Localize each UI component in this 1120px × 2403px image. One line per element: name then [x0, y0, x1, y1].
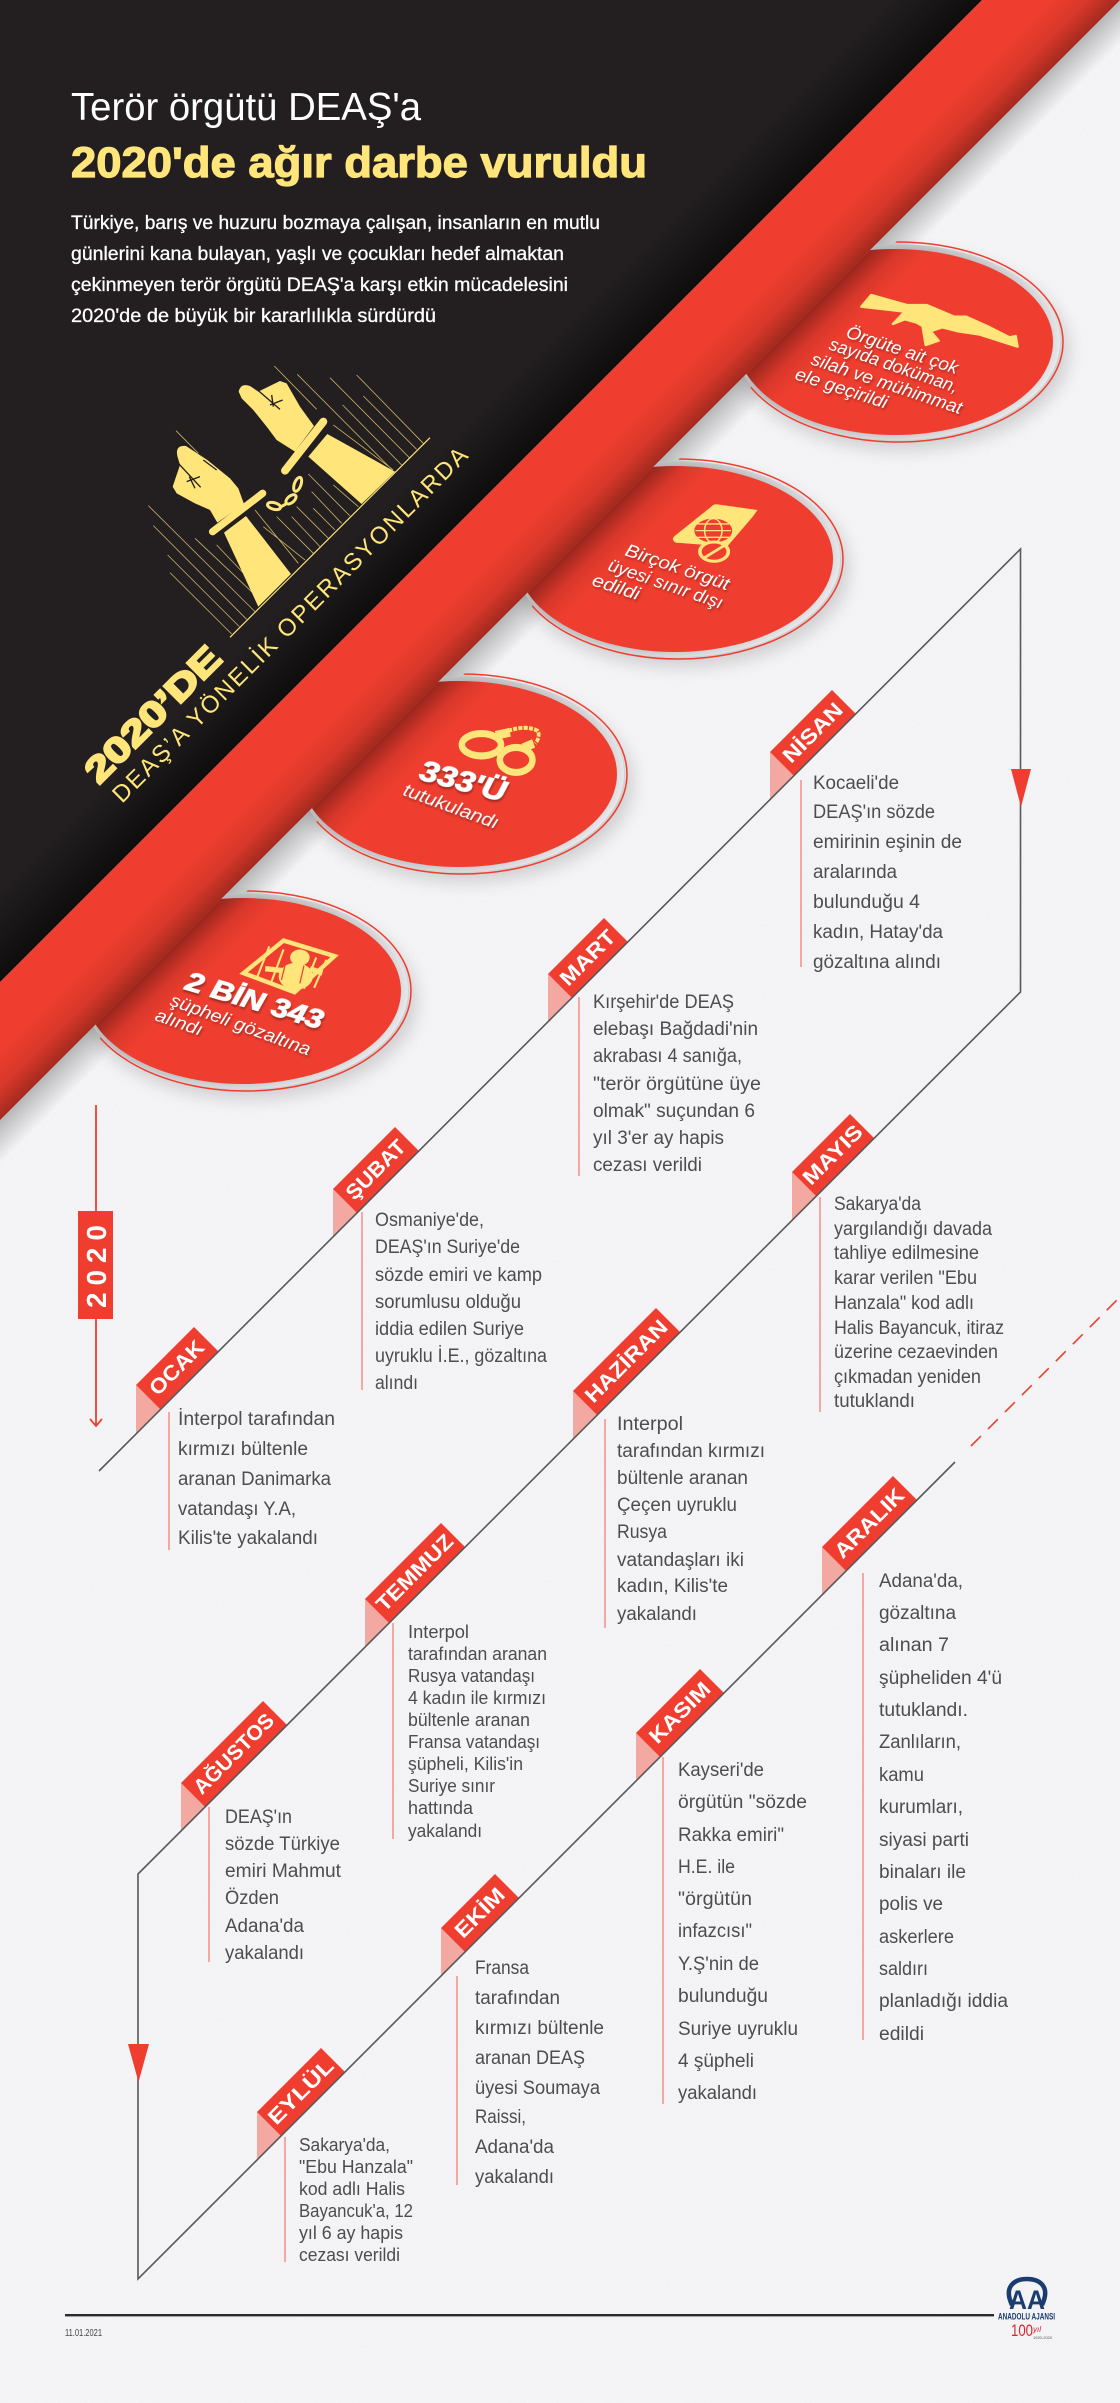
event text: OCAK: vatandaşı Y.A,	[178, 1499, 296, 1520]
event text: ARALIK: Adana'da,	[879, 1571, 963, 1592]
event text: ARALIK: siyasi parti	[879, 1830, 969, 1851]
title: 2020'de ağır darbe vuruldu	[71, 139, 647, 187]
event text: NİSAN: emirinin eşinin de	[813, 832, 962, 853]
black header panel	[0, 0, 982, 982]
event text: AĞUSTOS: sözde Türkiye	[225, 1834, 340, 1855]
event text: ARALIK: askerlere	[879, 1927, 954, 1948]
stat text: weapons: ele geçirildi	[793, 364, 891, 413]
month ribbon: ARALIK	[822, 1476, 917, 1595]
arrow: down on right vertical	[1011, 769, 1031, 807]
event text: KASIM: bulunduğu	[678, 1986, 768, 2007]
event text: KASIM: Y.Ş'nin de	[678, 1954, 759, 1975]
event text: NİSAN: kadın, Hatay'da	[813, 922, 943, 943]
stat number: 2 bin 343: 2 BİN 343	[181, 966, 327, 1035]
icon: person behind bars	[244, 941, 335, 992]
event text: EYLÜL: cezası verildi	[299, 2245, 400, 2265]
intro text block: Türkiye, barış ve huzuru bozmaya çalışan, insanların en mutlu	[71, 212, 600, 234]
event text: MART: cezası verildi	[593, 1155, 702, 1176]
event text: OCAK: kırmızı bültenle	[178, 1439, 308, 1460]
event text: ARALIK	[862, 1571, 1008, 2045]
timeline entry: MART	[548, 918, 761, 1176]
event text: MART: Kırşehir'de DEAŞ	[593, 992, 734, 1013]
event text: MAYIS: yargılandığı davada	[834, 1219, 992, 1240]
event text: KASIM: Rakka emiri"	[678, 1825, 784, 1846]
event text: EKİM	[456, 1958, 604, 2188]
stat circle shadow and rim: deported	[513, 459, 848, 666]
icon: handcuffs	[462, 728, 539, 772]
heading: rotated band title: 2020’DE	[77, 639, 229, 791]
logo: Anadolu Ajansi: 100	[1011, 2321, 1033, 2340]
event text: ARALIK: saldırı	[879, 1959, 928, 1980]
title: Terör örgütü DEAŞ'a	[71, 86, 421, 129]
event text: NİSAN: Kocaeli'de	[813, 773, 899, 794]
stat text: deported: üyesi sınır dışı	[606, 555, 726, 613]
intro text block: çekinmeyen terör örgütü DEAŞ'a karşı etkin mücadelesini	[71, 274, 568, 296]
stat text: detained: şüpheli gözaltına	[168, 990, 314, 1059]
stat: deported members	[590, 504, 758, 613]
event text: ARALIK: şüpheliden 4'ü	[879, 1668, 1002, 1689]
timeline entry: TEMMUZ	[365, 1523, 547, 1841]
stat text: weapons: silah ve mühimmat	[809, 349, 966, 418]
event text: HAZİRAN: bültenle aranan	[617, 1468, 748, 1489]
month ribbon: AĞUSTOS: AĞUSTOS	[188, 1708, 279, 1799]
intro text block: 2020'de de büyük bir kararlılıkla sürdürdü	[71, 305, 436, 327]
date: 11.01.2021	[65, 2327, 102, 2339]
stat text: arrested: tutukulandı	[401, 780, 501, 833]
stat text: deported	[590, 540, 733, 613]
event text: MART: olmak" suçundan 6	[593, 1101, 755, 1122]
month ribbon: HAZİRAN	[573, 1308, 680, 1439]
event text: NİSAN: DEAŞ'ın sözde	[813, 802, 935, 823]
event text: HAZİRAN: Rusya	[617, 1522, 667, 1543]
event text: EYLÜL	[284, 2135, 413, 2265]
timeline entry: EYLÜL	[257, 2048, 413, 2265]
month ribbon: MAYIS: MAYIS	[798, 1120, 868, 1190]
stat text: weapons: Örgüte ait çok	[844, 322, 962, 378]
event text: TEMMUZ: tarafından aranan	[408, 1644, 547, 1664]
event text: TEMMUZ: 4 kadın ile kırmızı	[408, 1688, 546, 1708]
event text: HAZİRAN: Çeçen uyruklu	[617, 1495, 737, 1516]
event text: MAYIS: üzerine cezaevinden	[834, 1342, 998, 1363]
event text: MAYIS: Sakarya'da	[834, 1194, 921, 1215]
event text: AĞUSTOS: yakalandı	[225, 1943, 304, 1964]
event text: EYLÜL: yıl 6 ay hapis	[299, 2223, 403, 2243]
year tag with red arrow	[78, 1105, 113, 1426]
stat text: deported: edildi	[590, 570, 644, 604]
month ribbon: MART	[548, 918, 628, 1022]
event text: ŞUBAT: sorumlusu olduğu	[375, 1292, 521, 1313]
event text: OCAK	[168, 1409, 335, 1550]
timeline entry: ARALIK	[822, 1476, 1008, 2045]
stat circle shadow and rim: weapons	[733, 242, 1068, 449]
event text: MART	[578, 992, 761, 1176]
timeline connector line	[99, 549, 1020, 2279]
event text: EKİM: aranan DEAŞ	[475, 2048, 585, 2069]
timeline entry: MAYIS	[792, 1114, 1004, 1412]
month ribbon: EKİM: EKİM	[450, 1883, 510, 1943]
event text: AĞUSTOS: emiri Mahmut	[225, 1861, 342, 1882]
stat circle shadow and rim: arrested	[297, 674, 632, 881]
arrow: down on left vertical	[128, 2044, 149, 2082]
event text: OCAK: Kilis'te yakalandı	[178, 1528, 318, 1549]
event text: ŞUBAT: uyruklu İ.E., gözaltına	[375, 1346, 547, 1367]
event text: TEMMUZ: Interpol	[408, 1622, 469, 1642]
event text: ARALIK: kurumları,	[879, 1797, 963, 1818]
month ribbon: TEMMUZ	[365, 1523, 465, 1647]
event text: HAZİRAN	[604, 1414, 765, 1628]
event text: AĞUSTOS: DEAŞ'ın	[225, 1807, 292, 1828]
event text: HAZİRAN: kadın, Kilis'te	[617, 1576, 728, 1597]
icon: rifle	[861, 295, 1017, 347]
intro text block: günlerini kana bulayan, yaşlı ve çocukları hedef almaktan	[71, 243, 564, 265]
event text: AĞUSTOS: Özden	[225, 1888, 279, 1909]
event text: ARALIK: gözaltına	[879, 1603, 956, 1624]
timeline entry: OCAK	[136, 1327, 335, 1550]
event text: MAYIS: tahliye edilmesine	[834, 1243, 979, 1264]
event text: ARALIK: planladığı iddia	[879, 1991, 1008, 2012]
event text: KASIM: H.E. ile	[678, 1857, 735, 1878]
event text: EYLÜL: Bayancuk'a, 12	[299, 2201, 413, 2221]
event text: NİSAN: bulunduğu 4	[813, 892, 920, 913]
event text: ARALIK: alınan 7	[879, 1635, 949, 1656]
event text: MAYIS	[819, 1194, 1004, 1412]
timeline entry: AĞUSTOS	[181, 1701, 342, 1964]
event text: MAYIS: karar verilen "Ebu	[834, 1268, 977, 1289]
month ribbon: MART: MART	[556, 925, 621, 991]
dashed continuation line	[971, 1297, 1120, 1446]
event text: MART: "terör örgütüne üye	[593, 1074, 761, 1095]
event text: ŞUBAT: Osmaniye'de,	[375, 1210, 484, 1231]
event text: EKİM: kırmızı bültenle	[475, 2018, 604, 2039]
month ribbon: NİSAN	[770, 690, 856, 800]
logo: Anadolu Ajansi	[998, 2279, 1055, 2340]
title	[71, 86, 647, 187]
icon: passport with ban sign	[673, 504, 758, 561]
footer rule	[65, 2314, 994, 2316]
event text: AĞUSTOS	[208, 1807, 342, 1964]
event text: MAYIS: Hanzala" kod adlı	[834, 1293, 974, 1314]
month ribbon: HAZİRAN: HAZİRAN	[581, 1316, 673, 1408]
month ribbon: OCAK: OCAK	[145, 1336, 209, 1400]
event text: ŞUBAT: sözde emiri ve kamp	[375, 1265, 542, 1286]
event text: KASIM: Suriye uyruklu	[678, 2019, 798, 2040]
month ribbon: NİSAN: NİSAN	[778, 698, 848, 768]
event text: KASIM: Kayseri'de	[678, 1760, 764, 1781]
event text: TEMMUZ	[392, 1622, 547, 1841]
stat text: weapons: sayıda doküman,	[827, 334, 961, 397]
event text: TEMMUZ: hattında	[408, 1798, 474, 1818]
month ribbon: KASIM	[636, 1669, 724, 1781]
event text: TEMMUZ: bültenle aranan	[408, 1710, 530, 1730]
event text: ARALIK: kamu	[879, 1765, 924, 1786]
event text: HAZİRAN: tarafından kırmızı	[617, 1441, 765, 1462]
event text: HAZİRAN: yakalandı	[617, 1604, 697, 1625]
event text: NİSAN: gözaltına alındı	[813, 952, 941, 973]
event text: ARALIK: polis ve	[879, 1894, 943, 1915]
stat: detained 2 343	[153, 941, 335, 1059]
month ribbon: EKİM	[441, 1874, 519, 1976]
event text: MART: yıl 3'er ay hapis	[593, 1128, 724, 1149]
timeline entry: EKİM	[441, 1874, 604, 2188]
heading: rotated band title: DEAŞ’A YÖNELİK OPERASYONLARDA	[107, 442, 473, 808]
event text: KASIM: infazcısı"	[678, 1921, 752, 1942]
red diagonal band	[0, 0, 1120, 1120]
event text: HAZİRAN: vatandaşları iki	[617, 1550, 744, 1571]
event text: MAYIS: tutuklandı	[834, 1391, 915, 1412]
event text: KASIM: 4 şüpheli	[678, 2051, 754, 2072]
event text: OCAK: İnterpol tarafından	[178, 1409, 335, 1430]
logo: Anadolu Ajansi: 1920-2020	[1033, 2335, 1053, 2340]
event text: TEMMUZ: şüpheli, Kilis'in	[408, 1754, 523, 1774]
timeline entry: ŞUBAT	[333, 1127, 547, 1394]
logo: Anadolu Ajansi: yıl	[1032, 2325, 1041, 2334]
intro text block	[71, 212, 600, 327]
month ribbon: AĞUSTOS	[181, 1701, 287, 1831]
event text: ARALIK: Zanlıların,	[879, 1732, 961, 1753]
event text: MART: akrabası 4 sanığa,	[593, 1046, 742, 1067]
timeline entry: KASIM	[636, 1669, 807, 2104]
event text: HAZİRAN: Interpol	[617, 1414, 683, 1435]
event text: ŞUBAT: iddia edilen Suriye	[375, 1319, 524, 1340]
stat text: weapons	[793, 322, 966, 418]
stat: weapons seized	[793, 295, 1017, 418]
event text: ARALIK: tutuklandı.	[879, 1700, 968, 1721]
month ribbon: TEMMUZ: TEMMUZ	[372, 1530, 458, 1616]
event text: ŞUBAT	[361, 1210, 547, 1394]
stat circle shadow and rim: detained	[81, 891, 416, 1098]
stat number: 333: 333'Ü	[416, 754, 511, 809]
event text: EYLÜL: Sakarya'da,	[299, 2135, 390, 2155]
event text: TEMMUZ: Fransa vatandaşı	[408, 1732, 540, 1752]
event text: ŞUBAT: alındı	[375, 1373, 418, 1394]
event text: EKİM: Adana'da	[475, 2137, 554, 2158]
month ribbon: ŞUBAT: ŞUBAT	[341, 1135, 411, 1205]
timeline entry: HAZİRAN	[573, 1308, 765, 1628]
event text: EKİM: tarafından	[475, 1988, 560, 2009]
event text: KASIM	[662, 1757, 807, 2104]
event text: KASIM: "örgütün	[678, 1889, 752, 1910]
event text: AĞUSTOS: Adana'da	[225, 1916, 304, 1937]
month ribbon: KASIM: KASIM	[645, 1678, 715, 1748]
event text: MART: elebaşı Bağdadi'nin	[593, 1019, 758, 1040]
event text: TEMMUZ: Suriye sınır	[408, 1776, 495, 1796]
event text: MAYIS: çıkmadan yeniden	[834, 1367, 981, 1388]
logo: Anadolu Ajansi: ANADOLU AJANSI	[998, 2312, 1055, 2322]
event text: EKİM: yakalandı	[475, 2167, 554, 2188]
month ribbon: OCAK	[136, 1327, 218, 1433]
month ribbon: ŞUBAT	[333, 1127, 419, 1237]
month ribbon: MAYIS	[792, 1114, 874, 1220]
timeline entry: NİSAN	[770, 690, 962, 973]
panel: circular statistics behind red band	[0, 0, 1120, 1190]
event text: EYLÜL: kod adlı Halis	[299, 2179, 405, 2199]
logo: Anadolu Ajansi: AA	[1009, 2285, 1045, 2315]
event text: ARALIK: binaları ile	[879, 1862, 966, 1883]
event text: NİSAN	[800, 773, 962, 973]
icon: handcuff chain	[267, 476, 303, 511]
event text: EKİM: Fransa	[475, 1958, 529, 1979]
month ribbon: EYLÜL	[257, 2048, 345, 2160]
event text: ŞUBAT: DEAŞ'ın Suriye'de	[375, 1237, 520, 1258]
event text: EKİM: üyesi Soumaya	[475, 2078, 600, 2099]
event text: TEMMUZ: yakalandı	[408, 1821, 482, 1841]
event text: OCAK: aranan Danimarka	[178, 1469, 331, 1490]
stat: arrested 333	[401, 728, 539, 833]
event text: MAYIS: Halis Bayancuk, itiraz	[834, 1318, 1004, 1339]
event text: EKİM: Raissi,	[475, 2107, 526, 2128]
icon: handcuffed hands behind bars	[148, 366, 430, 637]
event text: KASIM: örgütün "sözde	[678, 1792, 807, 1813]
event text: NİSAN: aralarında	[813, 862, 897, 883]
year tag with red arrow: 2020	[81, 1225, 112, 1308]
event text: EYLÜL: "Ebu Hanzala"	[299, 2157, 413, 2177]
stat text: deported: Birçok örgüt	[623, 540, 733, 595]
event text: ARALIK: edildi	[879, 2024, 924, 2045]
event text: TEMMUZ: Rusya vatandaşı	[408, 1666, 535, 1686]
event text: KASIM: yakalandı	[678, 2083, 757, 2104]
stat text: detained: alındı	[153, 1005, 206, 1040]
month ribbon: ARALIK: ARALIK	[830, 1484, 909, 1563]
month ribbon: EYLÜL: EYLÜL	[264, 2054, 339, 2130]
